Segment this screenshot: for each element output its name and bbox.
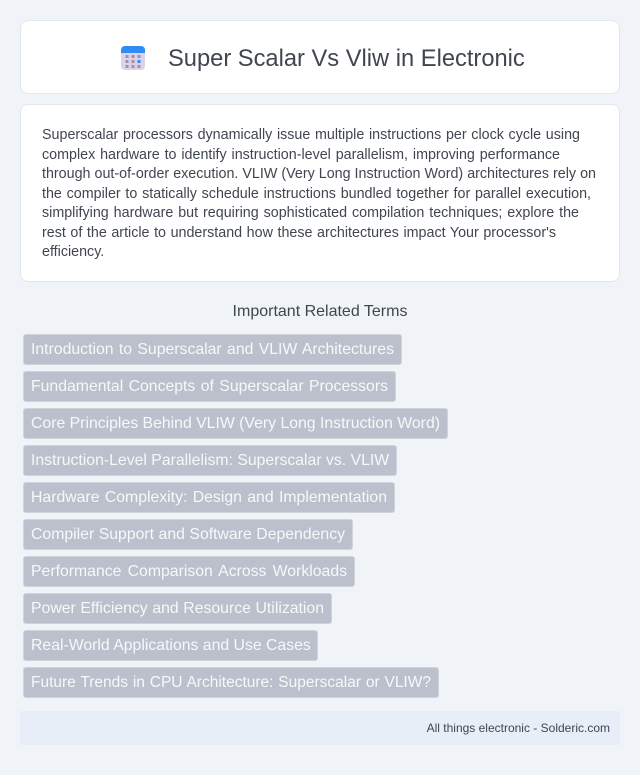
tag 1: Introduction to Superscalar and VLIW Architectures (31, 341, 394, 358)
intro paragraph: Superscalar processors dynamically issue multiple instructions per clock cycle using (42, 127, 580, 143)
header card (20, 20, 620, 94)
intro paragraph: the compiler to statically schedule instructions bundled together for parallel execution, (42, 186, 591, 202)
tag 9 (23, 630, 318, 661)
intro paragraph (42, 127, 596, 260)
intro paragraph: complex hardware to identify instruction-level parallelism, improving performance (42, 146, 560, 162)
title: Super Scalar Vs Vliw in Electronic (168, 46, 525, 72)
tag 2: Fundamental Concepts of Superscalar Processors (31, 378, 388, 395)
tag 5 (23, 482, 395, 513)
tag 3: Core Principles Behind VLIW (Very Long Instruction Word) (31, 415, 440, 432)
footer bar (20, 711, 620, 745)
tag 3 (23, 408, 448, 439)
intro paragraph: efficiency. (42, 244, 104, 260)
tag 8: Power Efficiency and Resource Utilization (31, 600, 324, 617)
intro text panel (20, 104, 620, 282)
tag 6: Compiler Support and Software Dependency (31, 526, 345, 543)
tag 7 (23, 556, 355, 587)
icon: calendar grid (121, 46, 145, 70)
tag 4 (23, 445, 397, 476)
tag 2 (23, 371, 396, 402)
tag 5: Hardware Complexity: Design and Implementation (31, 489, 387, 506)
intro paragraph: simplifying hardware but requiring sophisticated compilation techniques; explore the (42, 205, 579, 221)
tag 6 (23, 519, 353, 550)
intro paragraph: rest of the article to understand how these architectures impact Your processor's (42, 224, 556, 240)
tag 10 (23, 667, 439, 698)
related terms list (23, 334, 448, 698)
tag 10: Future Trends in CPU Architecture: Superscalar or VLIW? (31, 674, 431, 691)
intro paragraph: through out-of-order execution. VLIW (Very Long Instruction Word) architectures rely on (42, 166, 596, 182)
tag 7: Performance Comparison Across Workloads (31, 563, 347, 580)
tag 4: Instruction-Level Parallelism: Superscalar vs. VLIW (31, 452, 389, 469)
footer credit: All things electronic - Solderic.com (427, 721, 610, 735)
section heading: Important Related Terms (233, 303, 407, 320)
tag 1 (23, 334, 402, 365)
tag 8 (23, 593, 332, 624)
tag 9: Real-World Applications and Use Cases (31, 637, 311, 654)
